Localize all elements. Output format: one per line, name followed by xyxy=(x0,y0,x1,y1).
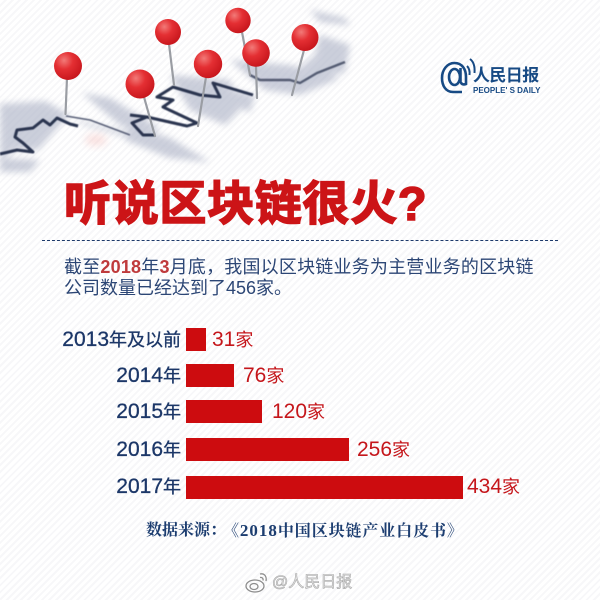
pins xyxy=(66,32,304,136)
row 2016: 2016年 xyxy=(116,438,181,461)
watermark text: @人民日报 xyxy=(272,574,352,591)
row 2015: 2015年 xyxy=(116,400,181,423)
source note: 数据来源： xyxy=(146,522,226,539)
row 2017: 434家 xyxy=(467,475,520,498)
logo: People's Daily xyxy=(440,58,540,95)
watermark: Weibo xyxy=(245,573,352,593)
dashed divider xyxy=(42,240,558,241)
row 2013: 31家 xyxy=(212,328,253,351)
title: 听说区块链很火? xyxy=(64,177,427,230)
row 2013: 2013年及以前 xyxy=(62,328,181,351)
intro text: 截至2018年3月底，我国以区块链业务为主营业务的区块链 xyxy=(64,257,534,277)
icon: at sign with signal waves xyxy=(440,58,476,94)
row 2016: 256家 xyxy=(357,438,410,461)
illustration: red pins on a line chart xyxy=(0,8,352,176)
pin heads xyxy=(54,8,318,98)
bar chart: blockchain companies by year xyxy=(62,328,520,499)
row 2017 xyxy=(116,475,520,499)
row 2014 xyxy=(116,364,284,387)
row 2015 xyxy=(116,400,325,423)
logo name: 人民日报 xyxy=(473,66,539,85)
row 2013 xyxy=(62,328,253,351)
chart line xyxy=(0,62,345,154)
intro text: 公司数量已经达到了456家。 xyxy=(64,278,292,298)
icon: weibo xyxy=(245,573,267,593)
intro text xyxy=(64,257,534,298)
row 2016 xyxy=(116,438,410,461)
logo subtitle: PEOPLE' S DAILY xyxy=(473,86,540,95)
row 2015: 120家 xyxy=(272,400,325,423)
faint red reflection xyxy=(85,134,107,146)
row 2017: 2017年 xyxy=(116,475,181,498)
chart shadows xyxy=(0,10,350,172)
source note: 《2018中国区块链产业白皮书》 xyxy=(223,521,464,540)
row 2014: 76家 xyxy=(243,364,284,387)
row 2014: 2014年 xyxy=(116,364,181,387)
